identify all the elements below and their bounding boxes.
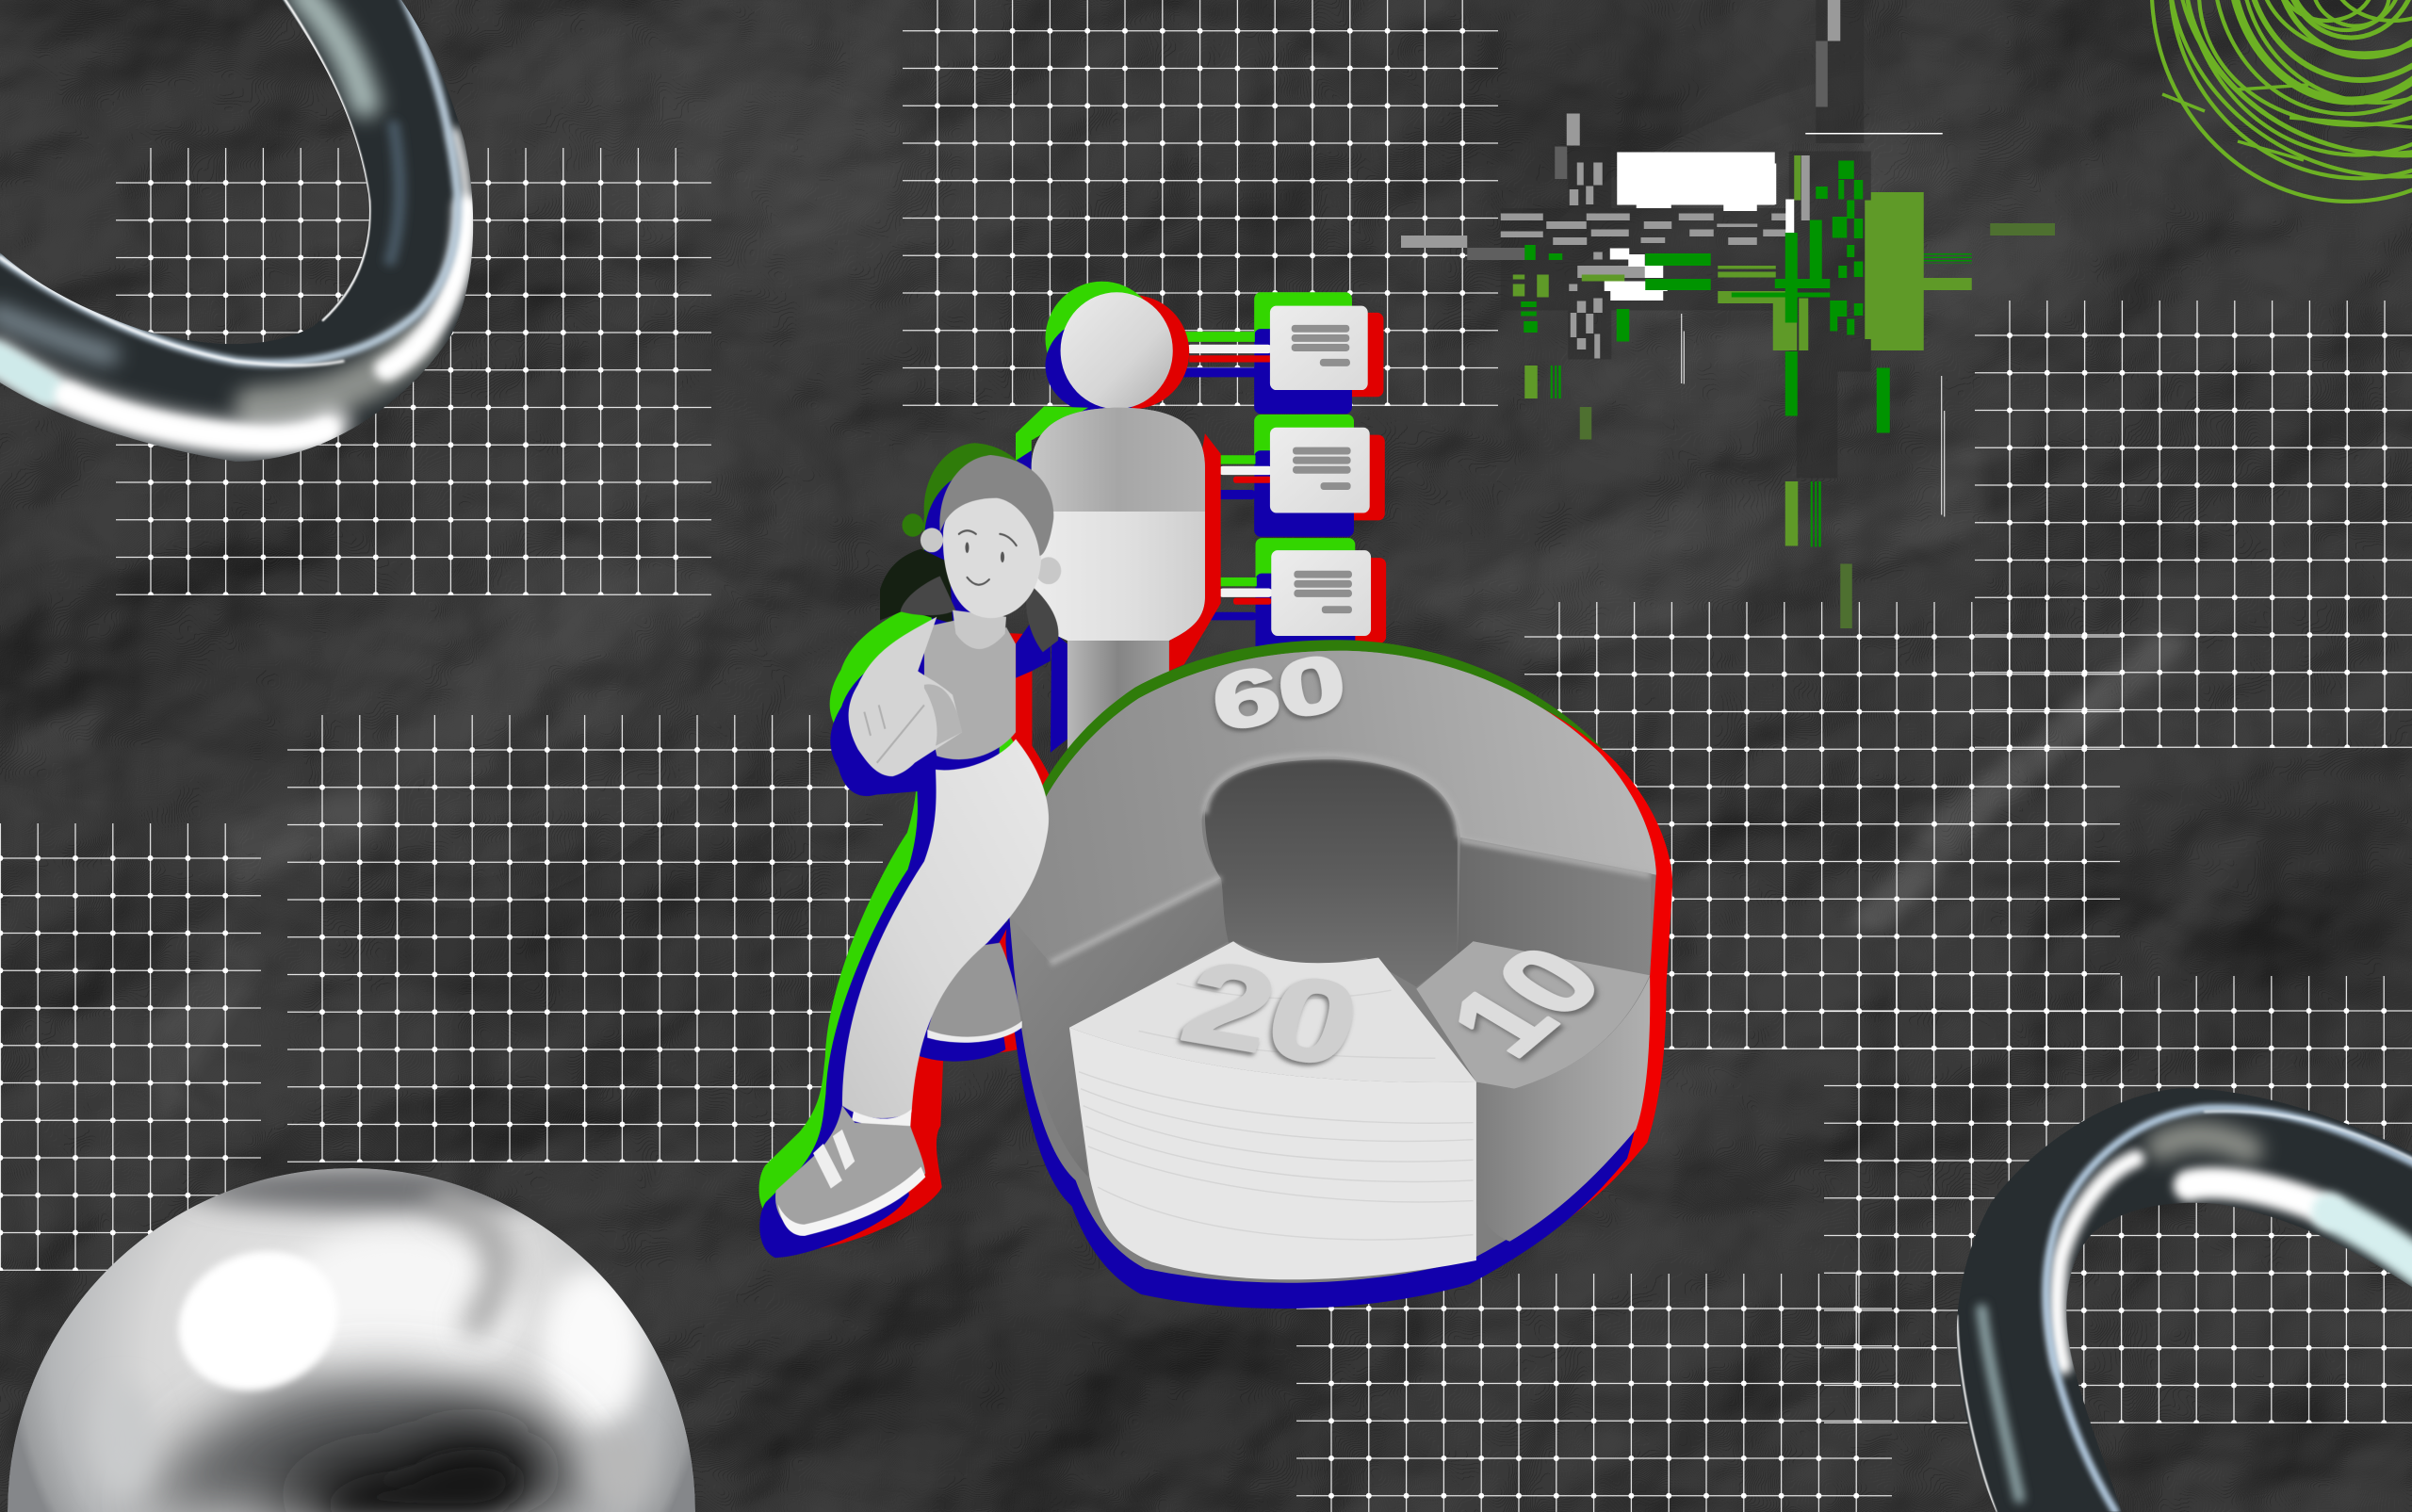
metal sphere <box>8 1166 695 1512</box>
colour offset of the woman <box>759 443 1065 1258</box>
connector bars <box>1170 332 1273 620</box>
segment 60 top face <box>1009 651 1656 963</box>
segment 60 left cut face <box>1009 878 1229 1177</box>
number 10: 10 <box>1422 927 1630 1074</box>
card shadows green blue red <box>1254 292 1386 659</box>
person icon: column and ball <box>1016 282 1221 759</box>
segment 20 <box>1069 935 1476 1279</box>
back leg and shoe <box>927 943 1022 1043</box>
card 3 <box>1271 550 1371 636</box>
donut chart <box>1005 637 1672 1309</box>
bevel highlights <box>1051 756 1650 963</box>
base walls <box>1009 651 1656 1283</box>
central hole <box>1205 759 1458 987</box>
glitch pattern cluster <box>1401 0 2055 628</box>
segment 60 right cut face <box>1458 837 1651 975</box>
shirt <box>924 620 1016 759</box>
facial features <box>959 530 1017 585</box>
back hair <box>900 577 1058 652</box>
hair <box>939 455 1053 556</box>
3D figure group: woman, pie chart, info column (zoom-space coordinates) <box>759 282 1672 1309</box>
neck <box>953 610 1006 649</box>
chart colour offsets <box>1005 640 1672 1309</box>
green scribble circle <box>2116 0 2412 232</box>
card 2 <box>1270 428 1370 512</box>
front shoe <box>775 1106 925 1236</box>
arm and hand <box>849 617 962 776</box>
card 1 <box>1270 306 1368 390</box>
info cards with coloured offsets <box>1170 292 1386 659</box>
metal ring: bottom right <box>1956 1088 2412 1512</box>
crease facets <box>9 113 2261 1168</box>
sleeve <box>924 684 962 746</box>
face <box>943 497 1041 618</box>
metal ring: top left <box>0 0 501 468</box>
number 20: 20 <box>1170 935 1373 1091</box>
front leg and pants <box>842 739 1049 1118</box>
number 60: 60 <box>1207 637 1351 748</box>
ears <box>921 528 1061 584</box>
woman character <box>775 455 1061 1236</box>
segment 10 <box>1416 927 1650 1242</box>
